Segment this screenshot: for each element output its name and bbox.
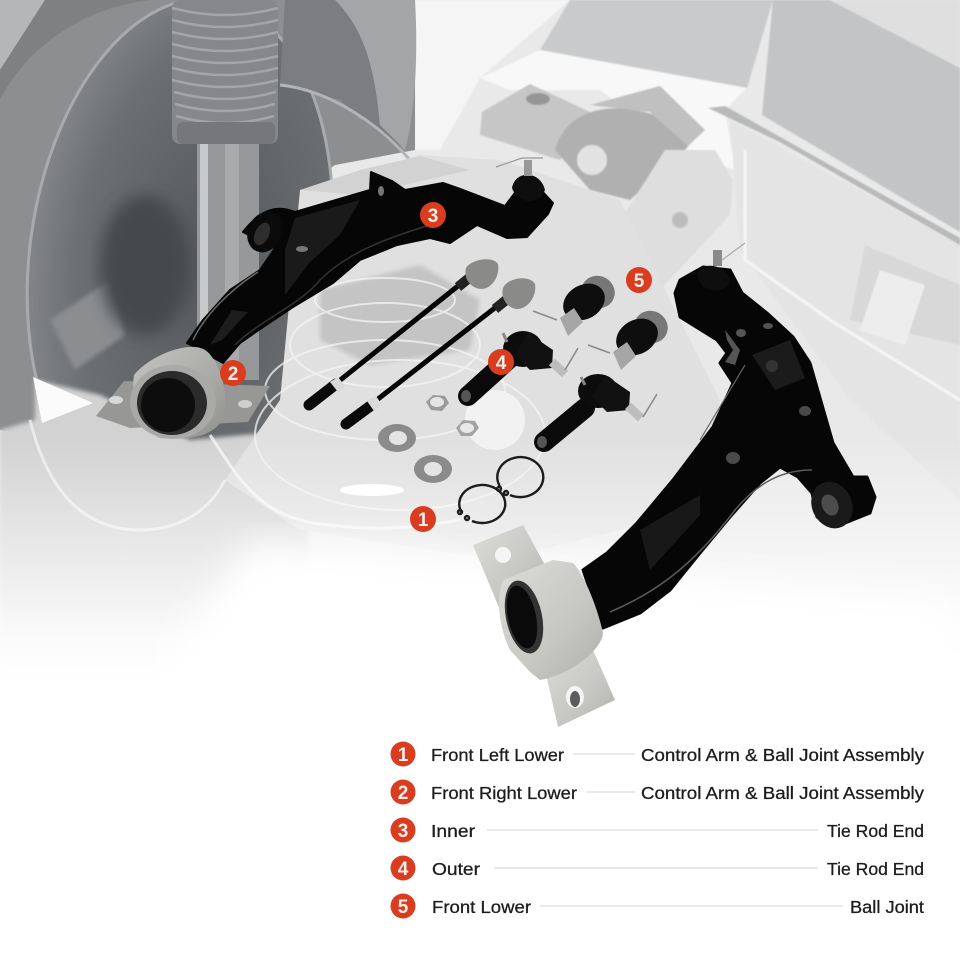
ball joint 2: [588, 305, 674, 370]
parts: small hardware: [378, 395, 543, 523]
outer tie rod end 1: [461, 331, 578, 402]
ball joint 1: [533, 270, 621, 336]
background: engine bay panels: [415, 0, 960, 500]
background: spring seat plate: [30, 155, 720, 560]
badge 2: [220, 360, 246, 386]
badge 4: 4: [496, 353, 507, 374]
washer 1: [378, 424, 416, 452]
washer 2: [414, 455, 452, 483]
background fade to white: [0, 440, 960, 960]
legend row 5: Ball Joint: [850, 897, 924, 917]
inner tie rod 2: [346, 278, 535, 424]
badge 5: 5: [634, 271, 645, 292]
legend row 5: [390, 894, 924, 918]
background: lower wheel and light wedge: [0, 377, 310, 720]
legend row 1: [390, 742, 924, 766]
background: shock absorber strut and bellows: [172, 0, 278, 380]
background: bracket and tube: [480, 84, 733, 290]
parts: outer tie rod ends: [461, 331, 657, 448]
right arm: rear bushing: [804, 475, 860, 535]
nut 1: [426, 395, 449, 411]
callout badges on photo: [220, 202, 652, 532]
badge 2: 2: [228, 364, 238, 385]
legend row 5: 5: [398, 897, 409, 918]
nut 2: [456, 420, 479, 436]
legend row 3: 3: [398, 821, 408, 842]
badge 3: 3: [428, 206, 438, 227]
parts: inner tie rods: [309, 259, 535, 424]
inner tie rod 1: [309, 259, 498, 405]
legend row 2: 2: [398, 783, 408, 804]
outer tie rod end 2: [537, 374, 657, 448]
parts: ball joints: [533, 270, 674, 370]
legend row 4: 4: [398, 859, 409, 880]
left control arm assembly: [96, 158, 553, 439]
badge 3: [420, 202, 446, 228]
right arm: ball joint: [697, 243, 745, 291]
snap ring 1: [497, 457, 543, 497]
legend row 2: [390, 780, 924, 804]
legend row 4: Tie Rod End: [827, 859, 924, 879]
legend row 2: Front Right Lower: [431, 783, 577, 803]
right arm: silver bushing with flange: [473, 525, 615, 727]
legend: [390, 742, 924, 918]
legend row 4: Outer: [432, 859, 480, 879]
legend row 3: [390, 818, 924, 842]
legend row 5: Front Lower: [432, 897, 531, 917]
legend row 1: Front Left Lower: [431, 745, 564, 765]
badge 1: 1: [418, 510, 429, 531]
legend row 2: Control Arm & Ball Joint Assembly: [641, 783, 924, 803]
right control arm assembly: [473, 243, 875, 727]
badge 5: [626, 267, 652, 293]
snap ring 2: [458, 485, 505, 523]
left arm: silver bushing with flange: [96, 347, 270, 439]
badge 4: [488, 349, 514, 375]
legend row 3: Tie Rod End: [827, 821, 924, 841]
left arm: rear bushing: [241, 206, 289, 258]
legend row 3: Inner: [431, 821, 475, 841]
legend row 4: [390, 856, 924, 880]
badge 1: [410, 506, 436, 532]
legend row 1: Control Arm & Ball Joint Assembly: [641, 745, 924, 765]
background: tyre and wheel well: [0, 0, 416, 720]
left arm: ball joint: [496, 158, 545, 201]
legend row 1: 1: [398, 745, 409, 766]
